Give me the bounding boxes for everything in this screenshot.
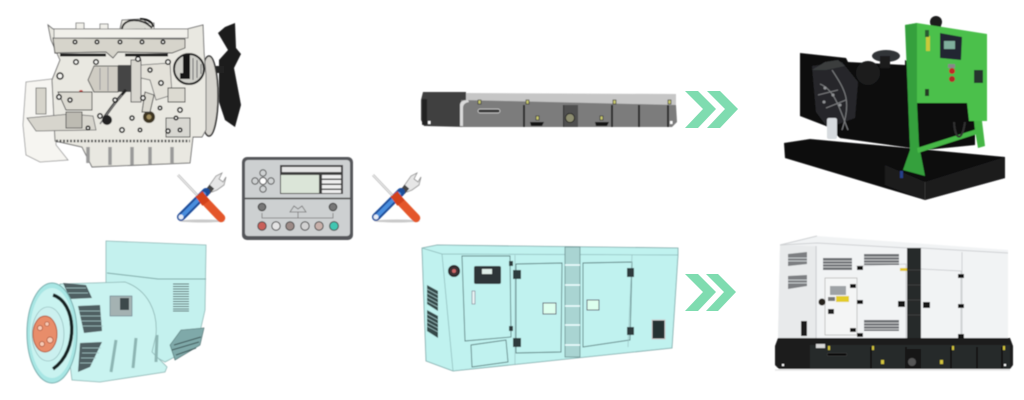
- base frame: [421, 92, 677, 127]
- engine illustration: [23, 19, 241, 167]
- arrow: bottom chevrons: [685, 274, 736, 311]
- sump ribs: [56, 140, 190, 142]
- main block: [48, 19, 206, 167]
- arrow: top chevrons: [685, 91, 738, 128]
- body: [60, 282, 167, 382]
- buttons: [948, 64, 955, 68]
- end bell: [27, 283, 77, 383]
- icon: tools left: [178, 173, 226, 222]
- side vents: [427, 285, 438, 338]
- controller: [940, 33, 962, 60]
- alternator illustration: [27, 241, 206, 383]
- icon: tools right: [373, 173, 421, 222]
- engine mass: [800, 53, 975, 150]
- labels: [543, 303, 556, 314]
- mode buttons: [258, 203, 266, 211]
- alternator unit: [174, 54, 204, 84]
- controller: [474, 266, 501, 284]
- pulley disc: [200, 56, 218, 136]
- hinges: [509, 261, 634, 347]
- nameplate: [110, 296, 132, 316]
- fan: [218, 23, 241, 127]
- vents: [788, 252, 807, 289]
- hub: [33, 316, 57, 352]
- keypad: [252, 170, 274, 192]
- dark column: [907, 248, 921, 338]
- vents: [63, 283, 102, 372]
- open generator set: [784, 16, 1005, 200]
- turbo: [88, 66, 118, 92]
- canopy: [778, 236, 1008, 338]
- door details: [830, 286, 846, 295]
- terminal box: [106, 241, 206, 362]
- ladder column: [565, 247, 580, 357]
- bolts: [57, 40, 182, 133]
- starter and pipes: [27, 114, 96, 131]
- black base: [775, 338, 1013, 369]
- display: [280, 165, 343, 194]
- canopy illustration: [422, 245, 678, 371]
- left doors: [462, 256, 632, 367]
- control panel: [242, 157, 353, 240]
- base: [784, 139, 1005, 200]
- flywheel housing: [23, 79, 68, 162]
- box vent: [173, 284, 189, 311]
- green enclosure: [905, 23, 987, 121]
- manifold: [53, 38, 185, 58]
- enclosed generator set: [775, 236, 1013, 371]
